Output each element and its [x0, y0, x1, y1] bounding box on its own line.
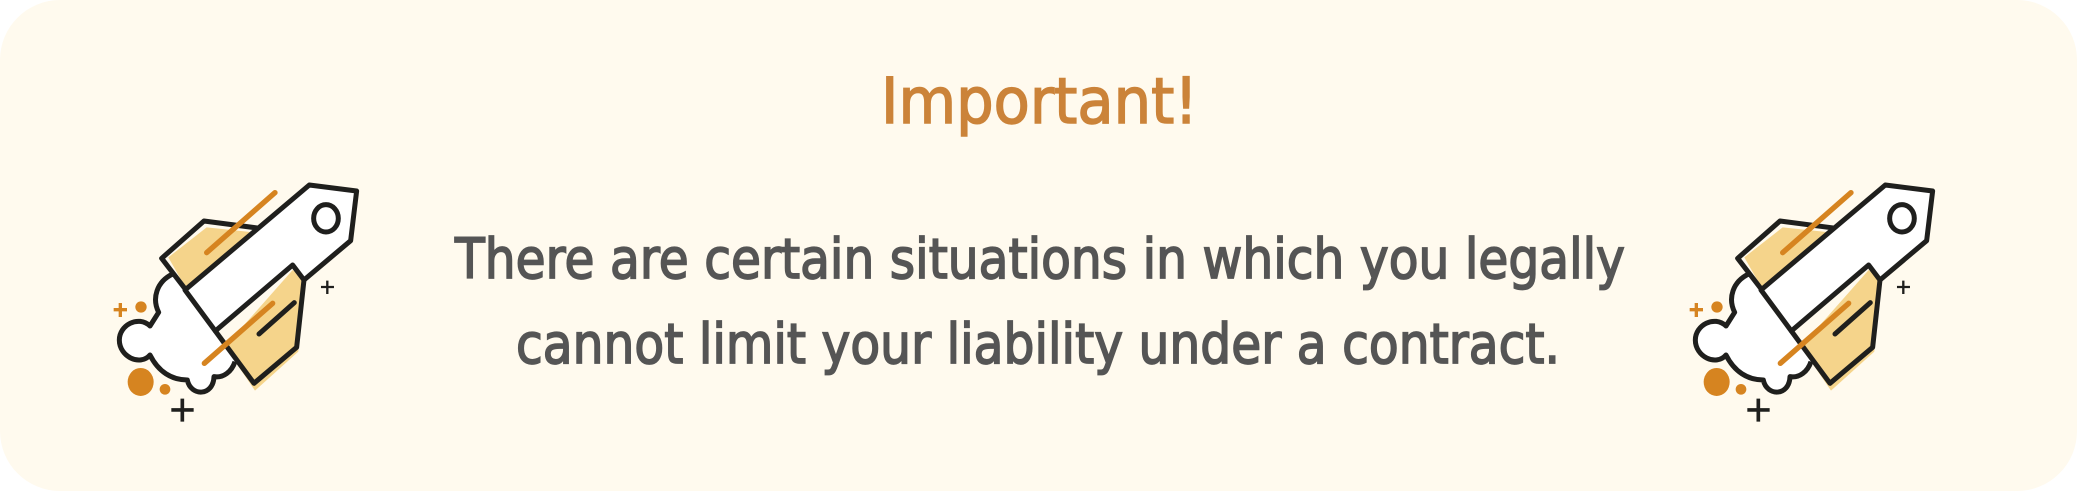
icon: rocket left: [114, 185, 357, 422]
icon: rocket right: [1690, 185, 1933, 422]
text block: body copy: [454, 227, 1625, 376]
title: Important!: [881, 65, 1198, 138]
text block: body copy: cannot limit your liability under a contract.: [516, 312, 1560, 376]
text block: body copy: There are certain situations in which you legally: [454, 227, 1625, 291]
